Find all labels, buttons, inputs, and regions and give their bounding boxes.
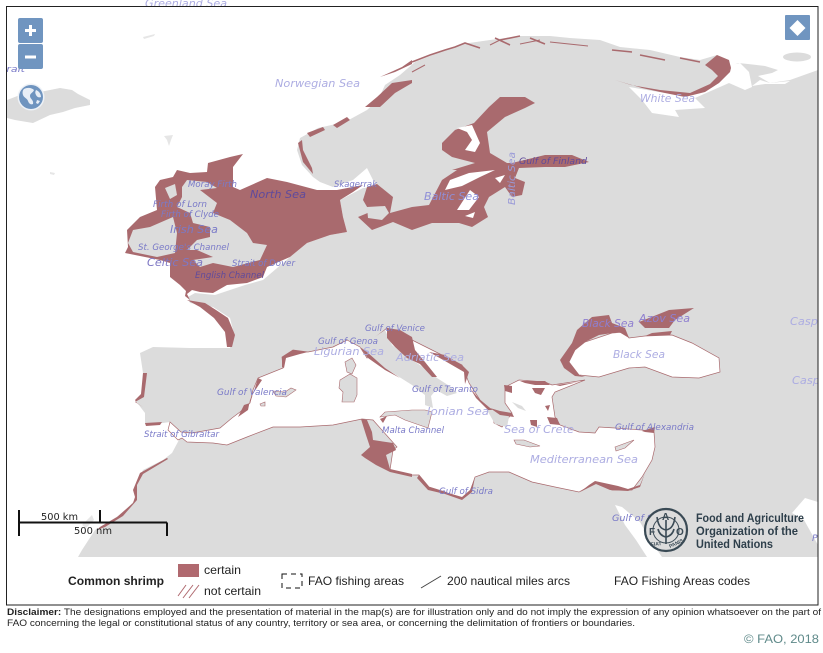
scale label nm: 500 nm xyxy=(74,526,112,537)
range: North Sea, British Isles and Channel xyxy=(125,154,363,300)
land: Greece and Aegean shores xyxy=(487,402,526,427)
legend swatch fishing areas xyxy=(282,574,302,588)
label: Moray Firth: Moray Firth xyxy=(188,180,237,190)
range: Azov Sea xyxy=(639,308,694,336)
sea: Persian Gulf xyxy=(792,498,818,545)
land: Novaya Zemlya xyxy=(783,52,811,62)
land: Europe, North Africa and Asia xyxy=(78,36,818,557)
legend text certain: certain xyxy=(204,563,241,577)
range: Norwegian coast xyxy=(298,60,412,174)
range: Northern Adriatic and Italian coast xyxy=(360,328,437,378)
range: Kola and White Sea xyxy=(615,55,731,97)
label: Baltic Sea: Baltic Sea xyxy=(424,190,479,203)
FAO name: United Nations xyxy=(696,539,773,551)
legend text not certain: not certain xyxy=(204,584,261,598)
disclaimer: FAO concerning the legal or constitutional status of any country, territory or sea area, or concerning the delimitation of frontiers or boundaries. xyxy=(7,618,635,629)
range: Spanish and French Mediterranean xyxy=(238,350,308,417)
label: Baltic Sea vertical: Baltic Sea xyxy=(507,152,518,205)
label: Strait of Dover: Strait of Dover xyxy=(232,259,296,269)
label: Ionian Sea: Ionian Sea xyxy=(427,405,489,418)
FAO logo xyxy=(645,509,804,551)
label: Malta Channel: Malta Channel xyxy=(382,426,444,436)
label: Black Sea lower: Black Sea xyxy=(613,348,665,361)
label: English Channel: English Channel xyxy=(195,271,264,281)
label: North Sea: North Sea xyxy=(250,188,306,201)
land: Mediterranean islands xyxy=(260,358,634,451)
legend swatch not certain xyxy=(178,585,199,598)
globe button xyxy=(18,84,44,110)
label: Sea of Crete: Sea of Crete xyxy=(504,423,574,436)
FAO name: Organization of the xyxy=(696,526,798,538)
zoom out button xyxy=(18,44,43,69)
label: Azov Sea: Azov Sea xyxy=(638,312,690,325)
label: Adriatic Sea: Adriatic Sea xyxy=(395,351,464,364)
legend swatch certain xyxy=(178,564,199,577)
label: Irish Sea: Irish Sea xyxy=(170,224,218,236)
legend xyxy=(68,563,750,598)
range: Baltic Sea xyxy=(358,97,589,230)
range: Black Sea north-west xyxy=(560,315,629,377)
disclaimer: Disclaimer: The designations employed and the presentation of material in the map(s) are for illustration only and do not imply the expression of any opinion whatsoever on the part of xyxy=(7,607,821,618)
sea: Mediterranean xyxy=(168,328,655,499)
land: small northern islands xyxy=(50,34,173,528)
sea: white Baltic patches xyxy=(445,125,505,218)
label: St. George's Channel: St. George's Channel xyxy=(138,243,229,253)
disclaimer xyxy=(7,607,821,629)
map panel xyxy=(7,34,818,557)
sea: Red Sea xyxy=(615,505,662,557)
FAO logo: PANIS xyxy=(668,538,685,550)
label: Gulf of Alexandria: Gulf of Alexandria xyxy=(615,423,694,433)
label: Celtic Sea: Celtic Sea xyxy=(147,256,203,269)
land: Hebrides xyxy=(165,184,177,199)
land: Danish islands xyxy=(367,206,389,220)
land: Great Britain xyxy=(177,180,267,267)
label: White Sea: White Sea xyxy=(640,92,695,105)
range: Aegean xyxy=(490,381,655,433)
label: Gulf of Valencia: Gulf of Valencia xyxy=(217,388,287,398)
label: Skagerrak: Skagerrak xyxy=(334,180,378,190)
scale label km: 500 km xyxy=(41,512,78,523)
label: Firth of Clyde: Firth of Clyde xyxy=(161,210,219,220)
legend swatch arcs xyxy=(421,576,441,588)
range: common shrimp (certain) xyxy=(97,36,731,530)
label: Gulf of Taranto: Gulf of Taranto xyxy=(412,385,478,395)
range: Gulf of Sidra and Libya xyxy=(417,473,645,500)
sea: White Sea and Barents inlet xyxy=(629,63,790,117)
range: Biscay xyxy=(187,300,235,347)
label: Black Sea upper: Black Sea xyxy=(582,317,634,330)
land: Italy xyxy=(360,330,457,408)
label: Gulf of Finland: Gulf of Finland xyxy=(519,157,587,167)
range: Iberia and Morocco xyxy=(97,373,168,530)
land: Ireland xyxy=(128,217,177,257)
label: Strait of Gibraltar: Strait of Gibraltar xyxy=(144,430,220,440)
land: Iceland xyxy=(7,88,90,123)
label: Norwegian Sea: Norwegian Sea xyxy=(275,77,360,90)
zoom in button xyxy=(18,18,43,43)
FAO logo: A xyxy=(662,512,669,523)
label: Gulf of Genoa: Gulf of Genoa xyxy=(318,337,378,347)
range: Tunisia and Gulf of Gabes xyxy=(361,416,412,477)
label: Gulf of Suez: Gulf of Suez xyxy=(612,514,670,524)
FAO logo: O xyxy=(676,527,684,538)
sea: Black Sea xyxy=(569,332,720,378)
legend text arcs: 200 nautical miles arcs xyxy=(447,574,570,588)
label: Firth of Lorn: Firth of Lorn xyxy=(153,200,207,210)
FAO name xyxy=(696,513,804,551)
FAO logo: F xyxy=(649,527,655,538)
legend text fishing areas: FAO fishing areas xyxy=(308,574,404,588)
FAO name: Food and Agriculture xyxy=(696,513,804,525)
label: Ligurian Sea: Ligurian Sea xyxy=(314,345,384,358)
legend text codes: FAO Fishing Areas codes xyxy=(614,574,750,588)
range: Dalmatian coast xyxy=(429,352,492,410)
FAO logo: FIAT xyxy=(651,541,662,548)
label: Mediterranean Sea: Mediterranean Sea xyxy=(530,453,638,466)
scale bar xyxy=(19,510,167,536)
legend title: Common shrimp xyxy=(68,574,164,588)
label: Gulf of Venice: Gulf of Venice xyxy=(365,324,425,334)
label: Gulf of Sidra: Gulf of Sidra xyxy=(439,487,493,497)
layers diamond button xyxy=(785,15,810,40)
copyright: © FAO, 2018 xyxy=(744,632,819,646)
